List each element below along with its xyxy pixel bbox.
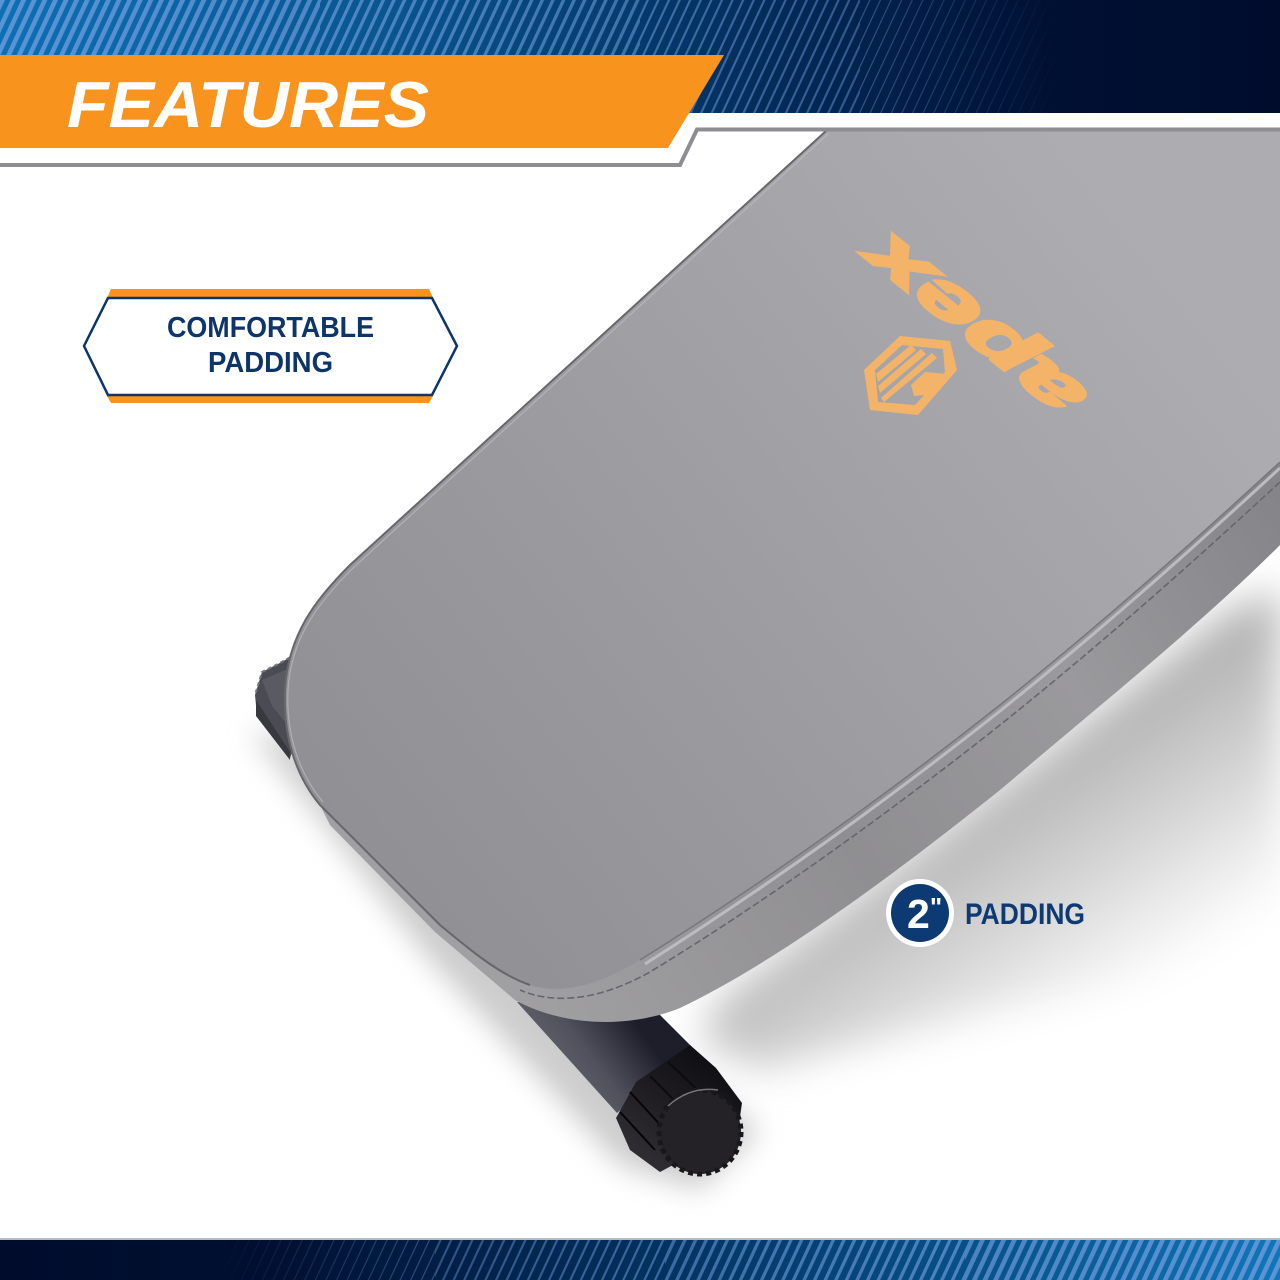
callout: comfortable padding: [84, 289, 457, 403]
logo hexagon emblem: [864, 336, 957, 415]
white band under banner: [0, 113, 1280, 166]
callout: 2 inch padding: 2: [907, 891, 930, 937]
callout: 2 inch padding: [886, 879, 1085, 947]
orange accent bars: [107, 289, 433, 403]
foot cap face: [659, 1090, 741, 1174]
seat right foot: [517, 1002, 742, 1174]
callout: comfortable padding: PADDING: [208, 347, 333, 379]
orange heading band: [0, 55, 724, 148]
callout text: COMFORTABLE: [167, 312, 374, 344]
heading text: FEATURES: [67, 68, 429, 141]
gray header rule: [0, 130, 1280, 165]
badge outline: [84, 298, 457, 395]
top banner: blue gradient with diagonal stripes: [0, 0, 1280, 113]
seat left foot: [255, 654, 310, 760]
bottom banner: [0, 1238, 1280, 1280]
bench pad top surface: [285, 131, 1280, 989]
features heading: [0, 55, 724, 148]
orange apex logo: [836, 228, 1106, 425]
pad seams and stitching: [285, 131, 1280, 998]
number badge: [886, 879, 954, 947]
bench pad side: [288, 450, 1280, 1022]
logo wordmark: apex: [836, 228, 1106, 425]
foot end cap body: [616, 1045, 742, 1172]
foot tube: [517, 1002, 692, 1113]
callout: 2 inch padding: ": [930, 892, 942, 922]
floor shadow: [250, 590, 1280, 1190]
padding label: PADDING: [965, 898, 1085, 931]
